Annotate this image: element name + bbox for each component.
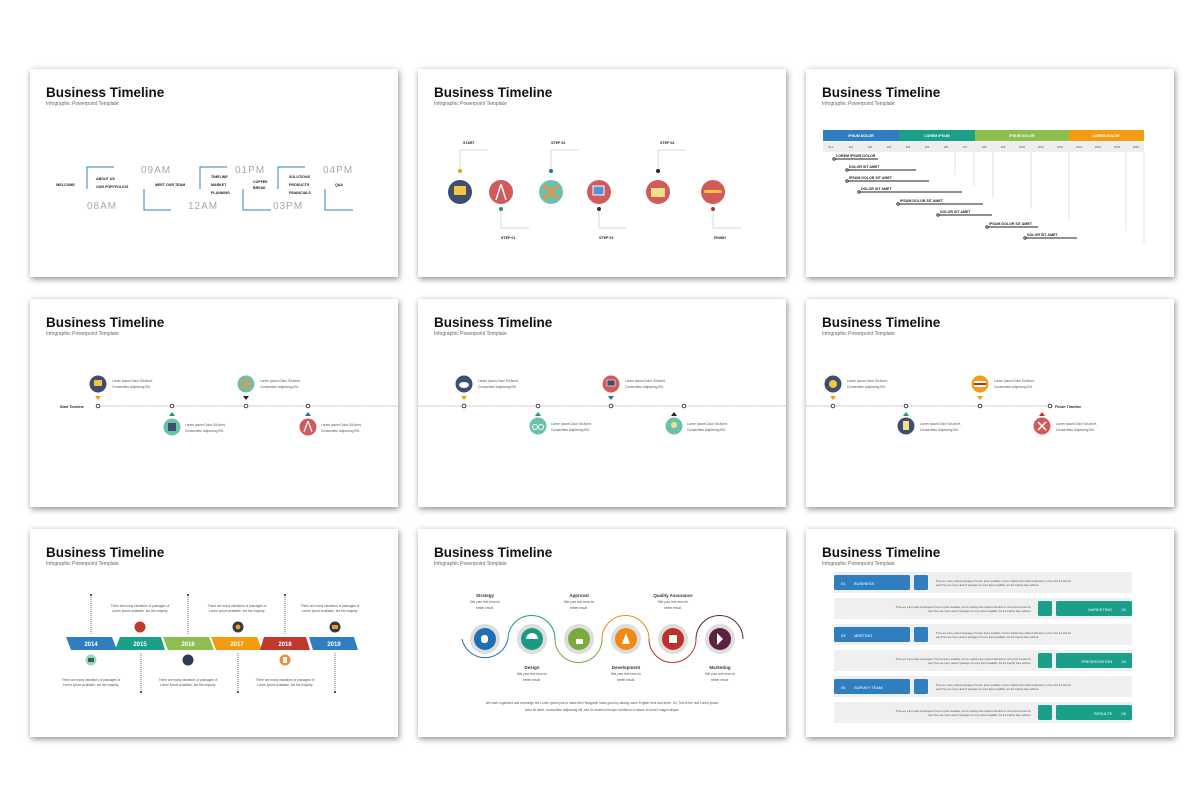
captions: Consectetur Adipiscing Elit. bbox=[920, 428, 959, 432]
captions: Lorem Ipsum Dolor Sit Amet, bbox=[920, 422, 961, 426]
captions: Consectetur Adipiscing Elit. bbox=[687, 428, 726, 432]
title: Business Timeline bbox=[46, 315, 165, 330]
year bars: 2019 bbox=[327, 642, 341, 648]
title: Infographic Powerpoint Template bbox=[46, 101, 119, 107]
row texts: leap There are many variat of passages of Lorem Ipsum available, but the majority have suffered. bbox=[928, 714, 1031, 717]
paragraph: We have organized and rearrange the Lorem ipsum just to make this Paragraph looks good by adding some English here and there. So, This is the real Lorem ipsum bbox=[486, 701, 719, 705]
dotted lines bbox=[91, 595, 335, 692]
captions: Lorem Ipsum Dolor Sit Amet, bbox=[687, 422, 728, 426]
row texts: leap There are many variat of passages of Lorem Ipsum available, but the majority have suffered. bbox=[928, 662, 1031, 665]
step labels: better result. bbox=[664, 606, 682, 610]
captions: Lorem Ipsum available, but the majority. bbox=[112, 609, 168, 613]
times: 09AM bbox=[141, 165, 171, 176]
paragraph: dolor sit amet, consectetur adipiscing elit, sed do eiusmod tempor incididunt ut labore et dolore magna aliqua. bbox=[525, 708, 679, 712]
gantt bars bbox=[833, 158, 1077, 239]
title bbox=[822, 315, 941, 337]
step labels bbox=[463, 141, 726, 240]
step labels: better result. bbox=[476, 606, 494, 610]
week row: W6 bbox=[944, 145, 949, 149]
panel: slide 3 gantt chart: IPSUM DOLOR SIT AMET bbox=[849, 176, 893, 180]
timeline line bbox=[418, 404, 786, 408]
step labels: STEP 01 bbox=[501, 236, 515, 240]
labels: OUR PORTFOLIOS bbox=[96, 185, 129, 189]
captions bbox=[112, 379, 362, 433]
icons bbox=[448, 180, 725, 204]
step labels: better result. bbox=[523, 678, 541, 682]
brackets bbox=[87, 167, 353, 210]
captions: Lorem Ipsum Dolor Sit Amet, bbox=[185, 423, 226, 427]
captions: Consectetur Adipiscing Elit. bbox=[847, 385, 886, 389]
step labels: better result. bbox=[570, 606, 588, 610]
title: Business Timeline bbox=[434, 85, 553, 100]
teal labels: 04 bbox=[1122, 659, 1127, 664]
captions: Consectetur Adipiscing Elit. bbox=[625, 385, 664, 389]
title: Infographic Powerpoint Template bbox=[434, 101, 507, 107]
step labels: STEP 04 bbox=[660, 141, 674, 145]
captions: Lorem Ipsum available, but the majority. bbox=[209, 609, 265, 613]
panel: slide 9 list rows bbox=[806, 529, 1174, 737]
times: 08AM bbox=[87, 201, 117, 212]
step labels: Site your text here for bbox=[611, 672, 642, 676]
labels: COFFEE bbox=[253, 180, 268, 184]
row texts: There are many variat of passages of Lorem Ipsum available, but the majority have suffered alteration in some form but also the bbox=[896, 606, 1032, 609]
week row: W9 bbox=[1001, 145, 1006, 149]
title: Business Timeline bbox=[822, 315, 941, 330]
title: Infographic Powerpoint Template bbox=[46, 331, 119, 337]
labels: PRODUCTS bbox=[289, 183, 310, 187]
week row: W-1 bbox=[828, 145, 834, 149]
week row bbox=[823, 142, 1144, 152]
captions: Lorem Ipsum Dolor Sit Amet, bbox=[625, 379, 666, 383]
title: Business Timeline bbox=[434, 545, 553, 560]
captions: Lorem Ipsum Dolor Sit Amet, bbox=[260, 379, 301, 383]
captions: Lorem Ipsum Dolor Sit Amet, bbox=[1056, 422, 1097, 426]
row texts: leap There are many variat of passages of Lorem Ipsum available, but the majority have suffered. bbox=[928, 610, 1031, 613]
step labels: STEP 03 bbox=[599, 236, 613, 240]
icons bbox=[86, 622, 340, 666]
dots bbox=[458, 169, 715, 211]
title bbox=[46, 545, 165, 567]
title: Business Timeline bbox=[434, 315, 553, 330]
blue labels: 01 bbox=[841, 581, 846, 586]
step labels: Development bbox=[612, 665, 641, 670]
week row: W11 bbox=[1038, 145, 1044, 149]
times: 01PM bbox=[235, 165, 265, 176]
labels: PLANNING bbox=[211, 191, 230, 195]
captions: Consectetur Adipiscing Elit. bbox=[1056, 428, 1095, 432]
panel: slide 5 middle timeline bbox=[418, 299, 786, 507]
week row: W8 bbox=[982, 145, 987, 149]
labels: MEET OUR TEAM bbox=[155, 183, 185, 187]
panel: slide 7 yearly timeline bbox=[30, 529, 398, 737]
times bbox=[87, 165, 353, 212]
step labels bbox=[470, 593, 736, 682]
panel: slide 3 gantt chart: LOREM IPSUM DOLOR bbox=[836, 154, 876, 158]
labels: FINANCIALS bbox=[289, 191, 311, 195]
row texts: There are many variat of passages of Lorem Ipsum available, but the majority have suffered alteration in some form but also the bbox=[896, 710, 1032, 713]
markers bbox=[830, 396, 1045, 416]
paragraph bbox=[486, 701, 719, 712]
panel: slide 3 gantt chart: IPSUM DOLOR SIT AMET bbox=[989, 222, 1033, 226]
row texts: leap There are many variat of passages of Lorem Ipsum available, but the majority have suffered. bbox=[936, 584, 1039, 587]
header bar: IPSUM DOLOR bbox=[1009, 134, 1035, 138]
week row: W16 bbox=[1133, 145, 1139, 149]
captions bbox=[847, 379, 1097, 432]
captions: Consectetur Adipiscing Elit. bbox=[478, 385, 517, 389]
arcs bbox=[462, 616, 743, 662]
blue labels: 05 bbox=[841, 685, 846, 690]
teal labels bbox=[1038, 601, 1132, 720]
captions: Consectetur Adipiscing Elit. bbox=[994, 385, 1033, 389]
captions: Lorem Ipsum Dolor Sit Amet, bbox=[994, 379, 1035, 383]
title bbox=[46, 315, 165, 337]
title: Infographic Powerpoint Template bbox=[434, 561, 507, 567]
blue labels: MEETING bbox=[854, 633, 872, 638]
captions: There are many variations of passages of bbox=[159, 678, 217, 682]
teal labels: 02 bbox=[1122, 607, 1127, 612]
panel: slide 2 step icons bbox=[418, 69, 786, 277]
captions: Consectetur Adipiscing Elit. bbox=[551, 428, 590, 432]
year bars: 2015 bbox=[133, 642, 147, 648]
icons bbox=[824, 376, 1050, 434]
labels: MARKET bbox=[211, 183, 227, 187]
panel: slide 6 finish timeline bbox=[806, 299, 1174, 507]
step labels: Site your text here for bbox=[658, 600, 689, 604]
teal labels: MARKETING bbox=[1088, 607, 1112, 612]
blue labels: BUSINESS bbox=[854, 581, 875, 586]
blue labels: 03 bbox=[841, 633, 846, 638]
captions: Lorem Ipsum Dolor Sit Amet, bbox=[478, 379, 519, 383]
panel: slide 4 start timeline bbox=[30, 299, 398, 507]
step labels: better result. bbox=[711, 678, 729, 682]
step labels: Site your text here for bbox=[705, 672, 736, 676]
step labels: Site your text here for bbox=[564, 600, 595, 604]
row texts: leap There are many variat of passages of Lorem Ipsum available, but the majority have suffered. bbox=[936, 688, 1039, 691]
captions: Lorem Ipsum Dolor Sit Amet, bbox=[847, 379, 888, 383]
header bar: LOREM DOLOR bbox=[1093, 134, 1120, 138]
captions: Lorem Ipsum available, but the majority. bbox=[302, 609, 358, 613]
markers bbox=[461, 396, 677, 416]
step labels: STEP 02 bbox=[551, 141, 565, 145]
labels: Q&A bbox=[335, 183, 343, 187]
blue labels: SURVEY TEAM bbox=[854, 685, 882, 690]
captions: Lorem Ipsum Dolor Sit Amet, bbox=[321, 423, 362, 427]
timeline line: Finish Timeline bbox=[1055, 405, 1081, 409]
week row: W4 bbox=[906, 145, 911, 149]
title bbox=[434, 315, 553, 337]
timeline line bbox=[806, 404, 1081, 409]
panel: slide 3 gantt chart: DOLOR SIT AMET bbox=[849, 165, 880, 169]
title bbox=[46, 85, 165, 107]
captions: There are many variations of passages of bbox=[62, 678, 120, 682]
captions: Consectetur Adipiscing Elit. bbox=[185, 429, 224, 433]
title bbox=[434, 545, 553, 567]
step labels: Site your text here for bbox=[517, 672, 548, 676]
title: Infographic Powerpoint Template bbox=[822, 561, 895, 567]
captions: Consectetur Adipiscing Elit. bbox=[112, 385, 151, 389]
labels bbox=[56, 175, 343, 195]
week row: W12 bbox=[1057, 145, 1063, 149]
year bars: 2014 bbox=[84, 642, 98, 648]
times: 03PM bbox=[273, 201, 303, 212]
times: 12AM bbox=[188, 201, 218, 212]
labels: WELCOME bbox=[56, 183, 75, 187]
captions: There are many variations of passages of bbox=[208, 604, 266, 608]
title: Infographic Powerpoint Template bbox=[434, 331, 507, 337]
year bars bbox=[66, 637, 358, 650]
year bars: 2018 bbox=[278, 642, 292, 648]
icons bbox=[456, 376, 682, 434]
step labels: FINISH bbox=[714, 236, 726, 240]
header bar bbox=[823, 130, 1144, 141]
captions: Lorem Ipsum Dolor Sit Amet, bbox=[551, 422, 592, 426]
row texts bbox=[896, 580, 1072, 717]
panel: slide 3 gantt chart bbox=[806, 69, 1174, 277]
step labels: Site your text here for bbox=[470, 600, 501, 604]
captions: Lorem Ipsum available, but the majority. bbox=[63, 683, 119, 687]
panel: slide 8 process wave bbox=[418, 529, 786, 737]
title: Infographic Powerpoint Template bbox=[46, 561, 119, 567]
row texts: There are many variat of passages of Lorem Ipsum available, but the majority have suffered alteration in some form but also the bbox=[936, 684, 1072, 687]
row texts: There are many variat of passages of Lorem Ipsum available, but the majority have suffered alteration in some form but also the bbox=[936, 632, 1072, 635]
week row: W2 bbox=[868, 145, 873, 149]
labels: SOLUTIONS bbox=[289, 175, 311, 179]
header bar: LOREM IPSUM bbox=[924, 134, 950, 138]
teal labels: PRESENTATION bbox=[1081, 659, 1112, 664]
step labels: START bbox=[463, 141, 476, 145]
icons bbox=[90, 376, 316, 436]
captions bbox=[62, 604, 359, 687]
captions bbox=[478, 379, 728, 432]
year bars: 2017 bbox=[230, 642, 244, 648]
step labels: Design bbox=[524, 665, 540, 670]
title: Business Timeline bbox=[46, 85, 165, 100]
captions: Lorem Ipsum available, but the majority. bbox=[160, 683, 216, 687]
year bars: 2016 bbox=[181, 642, 195, 648]
row texts: There are many variat of passages of Lorem Ipsum available, but the majority have suffered alteration in some form but also the bbox=[936, 580, 1072, 583]
captions: Lorem Ipsum available, but the majority. bbox=[257, 683, 313, 687]
step labels: Approval bbox=[569, 593, 589, 598]
title: Business Timeline bbox=[822, 85, 941, 100]
timeline line bbox=[60, 404, 398, 409]
title: Business Timeline bbox=[46, 545, 165, 560]
captions: There are many variations of passages of bbox=[111, 604, 169, 608]
week row: W10 bbox=[1019, 145, 1025, 149]
timeline line: Start Timeline bbox=[60, 405, 84, 409]
title: Infographic Powerpoint Template bbox=[822, 331, 895, 337]
title: Infographic Powerpoint Template bbox=[822, 101, 895, 107]
row texts: leap There are many variat of passages of Lorem Ipsum available, but the majority have suffered. bbox=[936, 636, 1039, 639]
panel: slide 3 gantt chart: DOLOR SIT AMET bbox=[1027, 233, 1058, 237]
panel: slide 3 gantt chart: DOLOR SIT AMET bbox=[940, 210, 971, 214]
captions: Lorem Ipsum Dolor Sit Amet, bbox=[112, 379, 153, 383]
week row: W5 bbox=[925, 145, 930, 149]
week row: W3 bbox=[887, 145, 892, 149]
teal labels: RESULTS bbox=[1094, 711, 1112, 716]
week row: W13 bbox=[1076, 145, 1082, 149]
captions: Consectetur Adipiscing Elit. bbox=[321, 429, 360, 433]
labels: ABOUT US bbox=[96, 177, 115, 181]
labels: TIMELINE bbox=[211, 175, 228, 179]
connectors bbox=[460, 150, 741, 228]
title bbox=[434, 85, 553, 107]
captions: Consectetur Adipiscing Elit. bbox=[260, 385, 299, 389]
captions: There are many variations of passages of bbox=[301, 604, 359, 608]
week row: W15 bbox=[1114, 145, 1120, 149]
labels: BREAK bbox=[253, 186, 266, 190]
panel: slide 3 gantt chart: DOLOR SIT AMET bbox=[861, 187, 892, 191]
header bar: IPSUM DOLOR bbox=[848, 134, 874, 138]
week row: W7 bbox=[963, 145, 968, 149]
title bbox=[822, 545, 941, 567]
captions: There are many variations of passages of bbox=[256, 678, 314, 682]
blue labels bbox=[834, 575, 928, 694]
step labels: Strategy bbox=[476, 593, 494, 598]
circles bbox=[470, 624, 735, 654]
row texts: There are many variat of passages of Lorem Ipsum available, but the majority have suffered alteration in some form but also the bbox=[896, 658, 1032, 661]
week row: W1 bbox=[849, 145, 854, 149]
panel: slide 3 gantt chart: IPSUM DOLOR SIT AMET bbox=[900, 199, 944, 203]
teal labels: 06 bbox=[1122, 711, 1127, 716]
title bbox=[822, 85, 941, 107]
row backgrounds bbox=[834, 572, 1132, 723]
step labels: Marketing bbox=[709, 665, 731, 670]
times: 04PM bbox=[323, 165, 353, 176]
markers bbox=[95, 396, 311, 416]
week row: W14 bbox=[1095, 145, 1101, 149]
step labels: better result. bbox=[617, 678, 635, 682]
title: Business Timeline bbox=[822, 545, 941, 560]
step labels: Quality Assurance bbox=[653, 593, 693, 598]
panel: slide 1 schedule timeline bbox=[30, 69, 398, 277]
